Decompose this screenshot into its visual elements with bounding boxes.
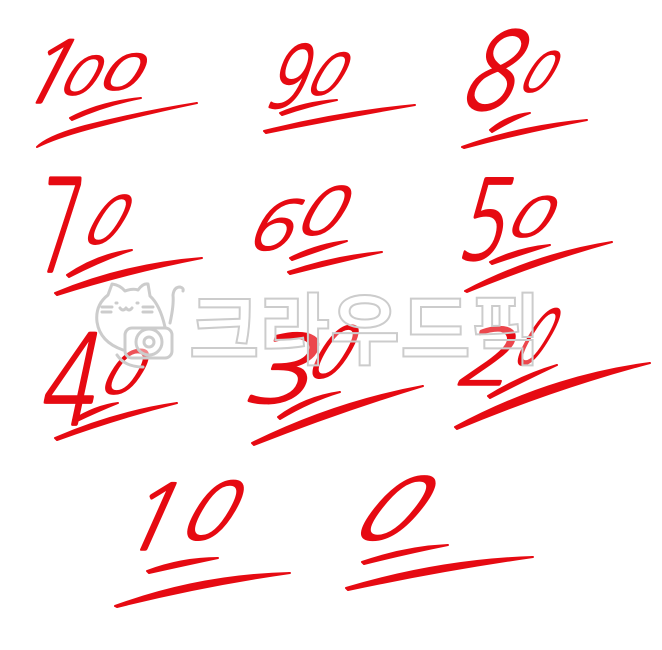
score 30: 3	[235, 324, 337, 417]
score 10: 0	[167, 472, 261, 552]
underline 50	[465, 242, 612, 292]
score 100: 0	[90, 49, 159, 98]
score 90: 9	[258, 36, 326, 121]
score 70: 0	[72, 188, 146, 254]
underline 0	[346, 545, 533, 590]
underline 60	[288, 241, 382, 274]
underline 40	[55, 403, 177, 440]
score 100: 1	[3, 31, 99, 116]
score 100	[3, 31, 159, 116]
underline 20	[455, 363, 650, 429]
score 10	[107, 472, 261, 563]
score 40: 4	[32, 318, 113, 443]
score 100: 0	[50, 50, 116, 103]
score 70	[34, 162, 146, 291]
score 80: 8	[450, 17, 546, 126]
score 20	[448, 301, 574, 396]
watermark: cat icon with camera	[97, 284, 183, 367]
score 50	[450, 165, 571, 276]
score 20: 0	[502, 301, 574, 377]
score 30	[235, 318, 373, 417]
score 0: 0	[334, 466, 460, 553]
watermark: brand name: 크라우드픽	[189, 287, 541, 375]
score 10: 1	[107, 472, 203, 563]
underline 30	[252, 386, 423, 445]
score 80: 0	[510, 46, 572, 101]
score 60	[239, 179, 367, 260]
score 50: 0	[497, 190, 571, 245]
score 20: 2	[448, 318, 533, 396]
underline 70	[55, 250, 202, 295]
underline 90	[264, 100, 415, 133]
score 40: 0	[90, 342, 163, 403]
underline 80	[462, 113, 587, 148]
score 50: 5	[450, 165, 525, 276]
score 60: 0	[285, 179, 367, 245]
score 90	[258, 36, 363, 121]
score 70: 7	[34, 162, 88, 291]
underline 100	[37, 98, 197, 147]
score 60: 6	[239, 192, 315, 260]
score 90: 0	[297, 46, 363, 104]
score 30: 0	[296, 318, 373, 389]
underline 10	[115, 558, 290, 607]
score 40	[32, 318, 163, 443]
